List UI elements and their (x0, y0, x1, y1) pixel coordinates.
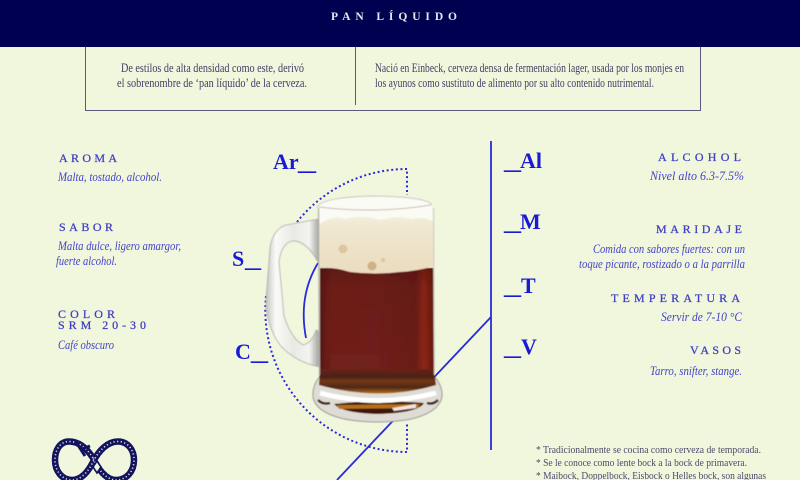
right letter labels: _ (502, 335, 523, 360)
maridaje: toque picante, rostizado o a la parrilla (579, 256, 745, 271)
color: COLOR (58, 307, 115, 321)
temperatura: Servir de 7-10 °C (661, 309, 742, 324)
right letter labels: M (520, 209, 541, 234)
footnotes: * Tradicionalmente se cocina como cerveza de temporada. (536, 444, 761, 456)
header band (0, 0, 800, 47)
left letter labels (232, 149, 318, 365)
icon: ouroboros infinity snake (55, 442, 134, 480)
aroma: Malta, tostado, alcohol. (57, 169, 162, 184)
glass rim (317, 196, 434, 224)
color: SRM 20-30 (58, 318, 146, 332)
right letter labels: _ (502, 210, 523, 235)
text: density note (117, 61, 307, 90)
solid arc (304, 263, 318, 338)
maridaje (579, 222, 745, 271)
right letter labels (502, 148, 542, 360)
alcohol: ALCOHOL (658, 150, 741, 164)
footnotes (536, 444, 766, 480)
title: PAN LÍQUIDO (331, 9, 457, 23)
sabor: SABOR (59, 220, 113, 234)
vasos: Tarro, snifter, stange. (650, 363, 742, 378)
text: origin note (375, 61, 685, 90)
maridaje: MARIDAJE (656, 222, 742, 236)
text: origin note: Nació en Einbeck, cerveza densa de fermentación lager, usada por los monjes en (375, 61, 685, 75)
right letter labels: T (521, 273, 536, 298)
foam (319, 205, 434, 274)
left letter labels: _ (244, 247, 262, 272)
glass edges (318, 208, 320, 375)
alcohol: Nivel alto 6.3-7.5% (649, 168, 744, 183)
vasos (650, 343, 742, 378)
sabor (56, 220, 181, 268)
column: left tasting notes (56, 151, 181, 352)
right letter labels: V (521, 334, 537, 359)
color: Café obscuro (58, 337, 114, 352)
diagram lines around mug (265, 141, 491, 480)
icon: beer mug (266, 196, 442, 422)
left letter labels: S (232, 246, 244, 271)
beer (320, 268, 434, 372)
dotted arc top (297, 169, 407, 222)
aroma: AROMA (59, 151, 117, 165)
beer bottom amber band (319, 369, 436, 394)
left letter labels: C (235, 339, 251, 364)
temperatura (611, 291, 742, 324)
vertical rule (490, 141, 492, 450)
mug handle (266, 219, 320, 367)
right letter labels: _ (502, 274, 523, 299)
left letter labels: _ (249, 340, 270, 365)
text: density note: el sobrenombre de ‘pan líquido’ de la cerveza. (117, 76, 307, 90)
diagonal line (337, 317, 491, 480)
aroma (57, 151, 162, 184)
left letter labels: Ar (273, 149, 299, 174)
right letter labels: _ (502, 149, 523, 174)
sabor: Malta dulce, ligero amargor, (57, 238, 181, 253)
left letter labels: _ (296, 150, 318, 175)
vasos: VASOS (690, 343, 741, 357)
temperatura: TEMPERATURA (611, 291, 740, 305)
sabor: fuerte alcohol. (56, 253, 117, 268)
mug base (313, 376, 442, 422)
alcohol (649, 150, 744, 183)
panel: intro box (86, 40, 700, 110)
dotted arc bottom (265, 296, 407, 452)
text: density note: De estilos de alta densidad como este, derivó (121, 61, 304, 75)
text: origin note: los ayunos como sustituto de alimento por su alto contenido nutrimental. (375, 76, 654, 90)
right letter labels: Al (520, 148, 542, 173)
column: right tasting notes (579, 150, 745, 378)
maridaje: Comida con sabores fuertes: con un (593, 241, 745, 256)
footnotes: * Se le conoce como lente bock a la bock de primavera. (536, 457, 747, 469)
color (58, 307, 146, 352)
